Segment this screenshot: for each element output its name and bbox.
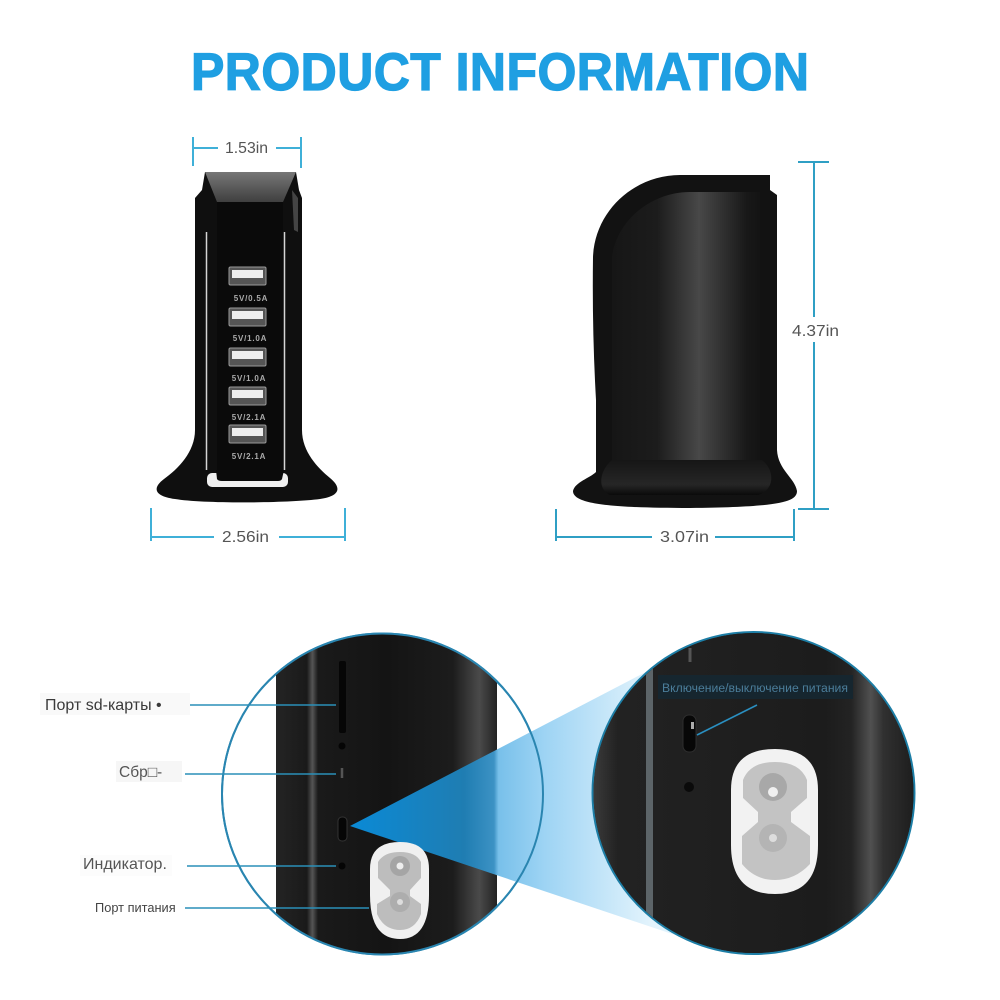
base shadow — [601, 460, 771, 495]
label: reset — [116, 761, 336, 782]
sd card slot — [339, 661, 346, 733]
title: PRODUCT INFORMATION — [191, 43, 809, 101]
device side close-up — [276, 630, 497, 960]
usb port 2 — [229, 308, 267, 343]
label: indicator: Индикатор. — [83, 856, 167, 873]
callout: power on/off: Включение/выключение питания — [662, 683, 848, 695]
left circle outline over beam — [222, 634, 543, 954]
side view charger — [573, 175, 797, 508]
callout: power on/off — [658, 675, 853, 735]
usb port 5: 5V/2.1A — [232, 452, 266, 461]
front view charger — [157, 172, 337, 502]
white gap — [207, 473, 288, 487]
reset hole — [341, 768, 343, 778]
label: sd card port — [40, 693, 336, 715]
dimension: top width 1.53in — [193, 137, 301, 168]
usb port 2: 5V/1.0A — [233, 334, 267, 343]
grey top — [205, 172, 296, 202]
label: reset: Сбр□- — [119, 764, 162, 781]
usb port 3: 5V/1.0A — [232, 374, 266, 383]
left detail circle — [222, 630, 543, 960]
dimension: depth 3.07in: 3.07in — [660, 529, 709, 546]
body panel — [612, 192, 760, 462]
dimension: base width 2.56in — [151, 508, 345, 546]
side highlight — [292, 190, 298, 232]
centre panel — [217, 202, 283, 470]
reset hole — [688, 648, 692, 662]
power switch — [338, 817, 347, 841]
usb port 1 — [229, 267, 268, 303]
label: power port: Порт питания — [95, 900, 176, 915]
left power socket — [370, 842, 429, 939]
dimension: depth 3.07in — [556, 509, 794, 546]
tower and flared base — [157, 172, 337, 502]
usb port 3 — [229, 348, 266, 383]
usb port 4 — [229, 387, 266, 422]
dimension: height 4.37in: 4.37in — [792, 323, 839, 340]
dimension: base width 2.56in: 2.56in — [222, 529, 269, 546]
indicator — [338, 862, 346, 870]
usb port 4: 5V/2.1A — [232, 413, 266, 422]
usb port 5 — [229, 425, 266, 461]
shell and flared base — [573, 175, 797, 508]
dimension: top width 1.53in: 1.53in — [225, 140, 268, 157]
zoom beam — [350, 649, 690, 940]
label: sd card port: Порт sd-карты • — [45, 697, 162, 714]
indicator — [684, 782, 694, 792]
right power socket — [731, 749, 818, 894]
power switch — [683, 715, 696, 752]
usb port 1: 5V/0.5A — [234, 294, 268, 303]
right detail circle — [592, 630, 916, 960]
label: indicator — [80, 855, 336, 876]
dimension: height 4.37in — [792, 162, 839, 509]
white edge lines — [206, 232, 284, 470]
